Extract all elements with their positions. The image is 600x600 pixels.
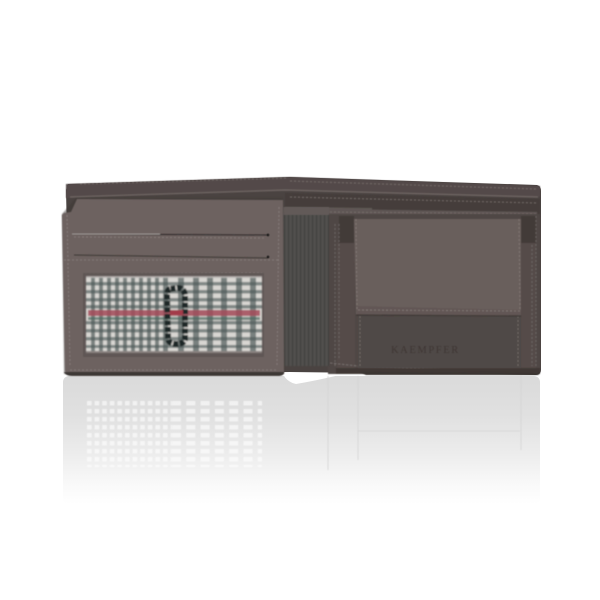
horizontal plaid stripes <box>86 282 262 348</box>
panel: left card holder <box>62 198 284 374</box>
green stripe <box>88 317 260 320</box>
back leather outer shell <box>66 177 541 375</box>
coin pocket <box>358 314 521 368</box>
window gloss edges <box>86 276 262 278</box>
card slot lines <box>64 207 279 370</box>
wallet <box>62 177 541 376</box>
window frame <box>83 273 264 357</box>
coin pocket flap <box>354 219 521 316</box>
top edge strips <box>66 177 540 218</box>
vertical plaid stripes <box>91 277 256 353</box>
panel: right inner pocket area <box>328 214 540 374</box>
dark central loop <box>167 288 185 344</box>
bottom dark edge <box>64 372 284 376</box>
reflection on the floor <box>63 372 540 504</box>
center pleated gusset <box>283 214 329 366</box>
card holder leather <box>62 199 284 374</box>
plaid fabric <box>86 276 262 353</box>
window with plaid lining <box>83 273 264 357</box>
brand emboss: KAEMPFER <box>391 345 460 356</box>
card holder shadow <box>62 198 284 374</box>
red stripe <box>88 310 260 316</box>
gusset top band <box>283 207 329 215</box>
